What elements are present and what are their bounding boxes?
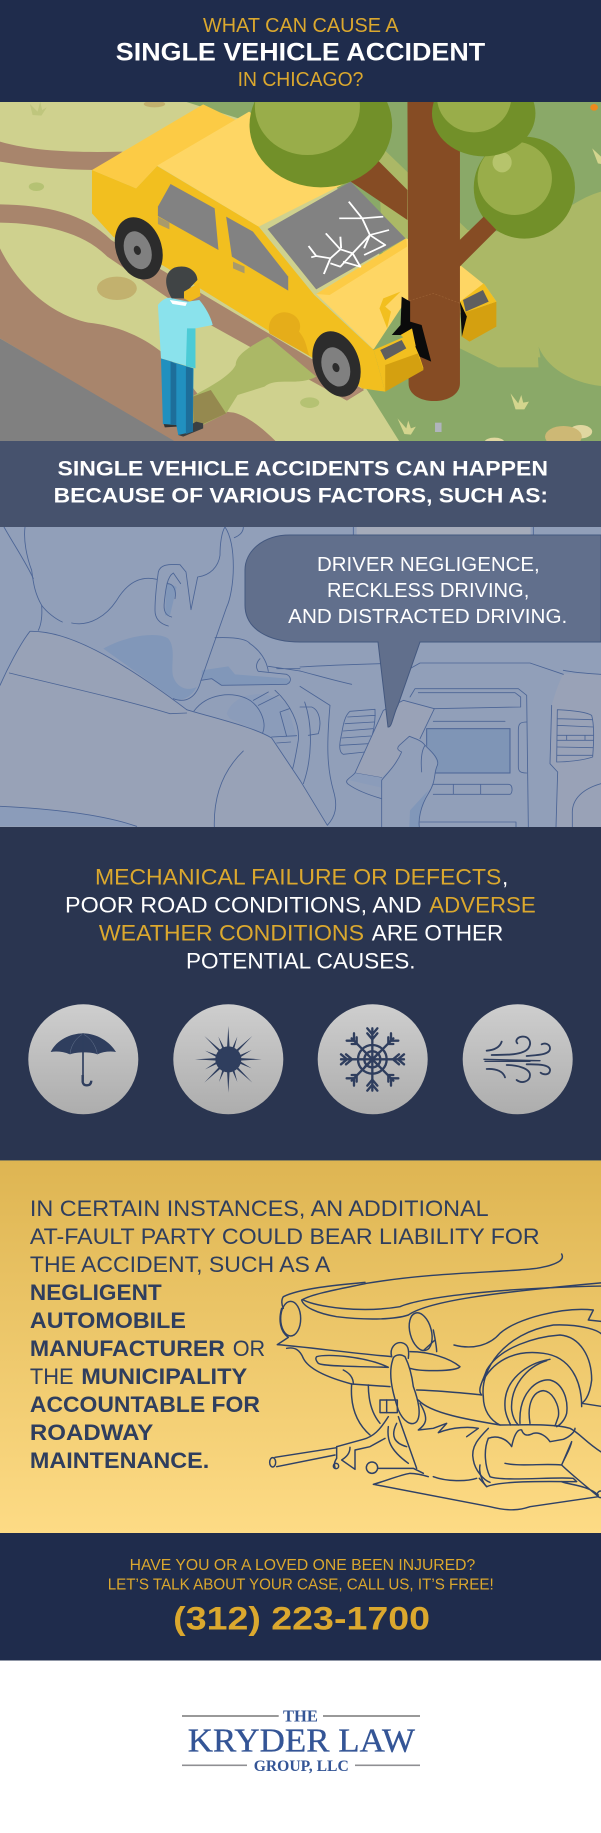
tree (250, 102, 575, 401)
panel: factors banner (0, 441, 601, 527)
speech bubble (245, 535, 601, 727)
text: liability paragraph: MAINTENANCE. (30, 1448, 209, 1473)
panel: driver on phone illustration (0, 527, 601, 827)
heading: factors line 2: BECAUSE OF VARIOUS FACTORS, SUCH AS: (54, 483, 548, 507)
car (92, 104, 496, 401)
right air vent (557, 710, 594, 762)
phone (364, 708, 434, 752)
roof (157, 112, 345, 227)
grass patch and shadow (193, 336, 316, 425)
icon: umbrella (28, 1004, 138, 1114)
text: other causes paragraph: MECHANICAL FAILURE OR DEFECTS (95, 865, 501, 890)
logo: the kryder law group: KRYDER LAW (188, 1723, 415, 1760)
heading: factors line 1: SINGLE VEHICLE ACCIDENTS CAN HAPPEN (58, 456, 548, 480)
grass tufts (30, 102, 47, 116)
bubble line 1: DRIVER NEGLIGENCE, (317, 554, 540, 576)
heading: single vehicle accident: SINGLE VEHICLE ACCIDENT (116, 39, 485, 67)
text: other causes paragraph (65, 865, 536, 974)
cracked glass (309, 202, 389, 274)
person (158, 266, 213, 437)
text: other causes paragraph: , (502, 865, 508, 890)
branches (351, 160, 407, 220)
hood (316, 238, 496, 349)
text: phone number: (312) 223-1700 (173, 1600, 430, 1636)
icon: wind (463, 1004, 573, 1114)
icon: sun (173, 1004, 283, 1114)
ground (0, 102, 399, 441)
car shadow strip (348, 388, 364, 400)
rear wheel (114, 217, 163, 280)
dent lines (379, 292, 401, 328)
dirt tracks (0, 142, 123, 170)
car body side (92, 166, 385, 392)
shirt (158, 298, 213, 368)
trousers (161, 358, 194, 435)
text: liability paragraph: AT-FAULT PARTY COULD BEAR LIABILITY FOR (30, 1224, 540, 1249)
logo: the kryder law group (182, 1707, 420, 1775)
windshield (268, 182, 406, 289)
text: call to action line 2: LET’S TALK ABOUT YOUR CASE, CALL US, IT’S FREE! (108, 1576, 494, 1593)
driver line art (0, 527, 328, 827)
rocks and spots (97, 277, 137, 300)
text: other causes paragraph: ADVERSE (429, 893, 536, 918)
hand holding phone (426, 746, 437, 785)
asphalt road (0, 338, 178, 443)
left air vent (340, 709, 375, 754)
panel: title header (0, 0, 601, 102)
logo: the kryder law group: GROUP, LLC (254, 1758, 349, 1775)
text: other causes paragraph: WEATHER CONDITIONS (99, 921, 364, 946)
text: liability paragraph: THE ACCIDENT, SUCH AS A (30, 1252, 330, 1277)
bubble line 3: AND DISTRACTED DRIVING. (288, 606, 567, 628)
trunk lid (92, 104, 236, 188)
text: liability paragraph: OR (233, 1336, 265, 1361)
text: liability paragraph: MANUFACTURER (30, 1336, 225, 1361)
heading: what can cause a: WHAT CAN CAUSE A (203, 15, 399, 37)
front bumper and crumple (374, 297, 467, 392)
right foliage (432, 102, 536, 156)
head and hand (166, 266, 197, 298)
left foliage (250, 102, 392, 188)
dashboard line art (300, 527, 601, 827)
text: liability paragraph (30, 1196, 540, 1473)
text: other causes paragraph: POOR ROAD CONDITIONS, AND (65, 893, 422, 918)
panel: liability (0, 1160, 601, 1533)
text: call to action line 1: HAVE YOU OR A LOVED ONE BEEN INJURED? (130, 1557, 476, 1574)
panel: crash scene illustration (0, 102, 601, 441)
panel: other causes (0, 827, 601, 1160)
text: liability paragraph: THE (30, 1364, 74, 1389)
rear foliage (474, 137, 575, 239)
text: liability paragraph: AUTOMOBILE (30, 1308, 186, 1333)
text: liability paragraph: ACCOUNTABLE FOR (30, 1392, 260, 1417)
illustration: mechanic under car (270, 1254, 601, 1510)
text: liability paragraph: ROADWAY (30, 1420, 153, 1445)
shoes (164, 424, 177, 428)
text: liability paragraph: MUNICIPALITY (81, 1364, 247, 1389)
door shadow (269, 312, 310, 356)
text: liability paragraph: IN CERTAIN INSTANCES, AN ADDITIONAL (30, 1196, 489, 1221)
icon: snowflake (318, 1004, 428, 1114)
side windows (158, 184, 218, 250)
panel: call to action (0, 1533, 601, 1660)
heading: in chicago: IN CHICAGO? (238, 69, 363, 91)
bubble line 2: RECKLESS DRIVING, (327, 580, 529, 602)
right bumper (462, 302, 496, 342)
text: other causes paragraph: POTENTIAL CAUSES. (186, 949, 416, 974)
text: other causes paragraph: ARE OTHER (372, 921, 503, 946)
logo: the kryder law group: THE (283, 1707, 318, 1726)
text: liability paragraph: NEGLIGENT (30, 1280, 162, 1305)
front wheel (312, 331, 361, 397)
trunk (407, 100, 460, 401)
